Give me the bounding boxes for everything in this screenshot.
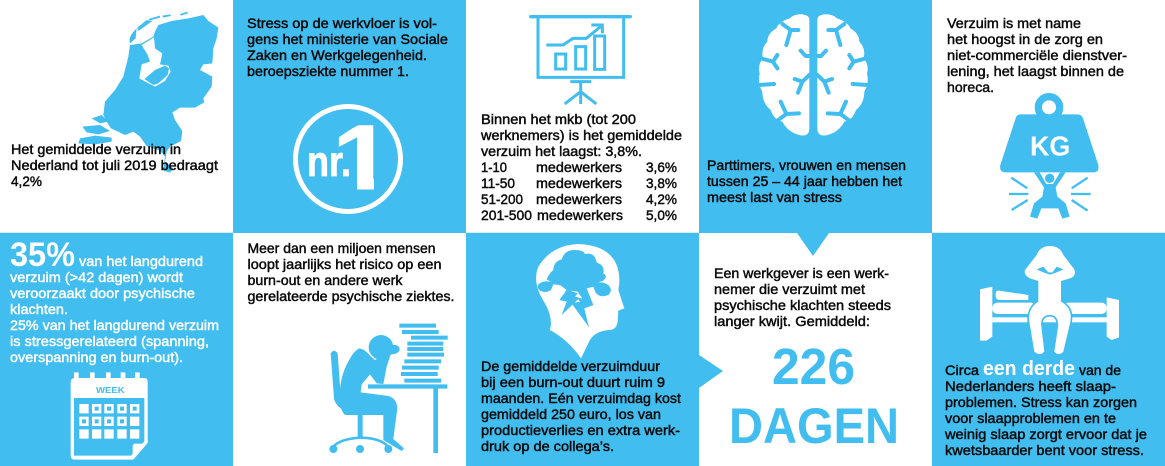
text: sector: niet-commerciële dienstver-	[947, 47, 1127, 63]
text: slaap: Circa	[945, 362, 979, 378]
text: werkgever: Een werkgever is een werk-	[714, 265, 889, 281]
text: beroepsziekte: Stress op de werkvloer is vol-	[247, 15, 437, 31]
icon: person lifting KG weight: KG	[1030, 130, 1070, 161]
icon: person sitting on bed	[980, 246, 1119, 354]
table: verzuim per bedrijfsgrootte: medewerkers	[536, 175, 622, 191]
panel: beroepsziekte nummer 1	[233, 0, 466, 233]
icon: map of the Netherlands	[78, 12, 218, 173]
icon: nr. 1 badge: 1	[332, 107, 393, 209]
table: verzuim per bedrijfsgrootte: 3,8%	[646, 175, 677, 191]
icon: head with storm cloud	[536, 244, 624, 358]
text: verzuimduur: maanden. Eén verzuimdag kost	[481, 390, 681, 406]
table: verzuim per bedrijfsgrootte: 1-10	[481, 159, 507, 175]
text: 35 procent: veroorzaakt door psychische	[10, 285, 195, 301]
text: slaap: van de	[1079, 362, 1121, 378]
text: sector	[947, 15, 1127, 95]
text: parttimers: meest last van stress	[707, 189, 842, 205]
stat: 226 dagen: DAGEN	[729, 398, 899, 454]
text: mkb intro	[480, 111, 682, 159]
table: verzuim per bedrijfsgrootte: 11-50	[481, 175, 515, 191]
panel: slaapproblemen	[932, 233, 1165, 466]
text: slaap: een derde	[983, 358, 1075, 380]
table: verzuim per bedrijfsgrootte: 4,2%	[646, 191, 677, 207]
text: 35 procent: klachten.	[10, 301, 68, 317]
text: 35 procent: van het langdurend	[79, 253, 203, 269]
text: sector: Verzuim is met name	[947, 15, 1081, 31]
stat: 226 dagen: 226	[772, 338, 855, 395]
text: slaap	[944, 358, 1147, 458]
panel: gemiddeld verzuim Nederland	[0, 0, 233, 233]
icon: brain	[759, 14, 868, 135]
text: verzuimduur: druk op de collega’s.	[481, 438, 614, 454]
arrow: down from parttimers panel	[797, 233, 829, 256]
text: burn-out risico: Meer dan een miljoen mensen	[248, 240, 436, 256]
table: verzuim per bedrijfsgrootte: medewerkers	[536, 159, 622, 175]
text: 35 procent: 25% van het langdurend verzuim	[10, 317, 219, 333]
text: mkb intro: werknemers) is het gemiddelde	[480, 127, 682, 143]
table: verzuim per bedrijfsgrootte: 3,6%	[646, 159, 677, 175]
icon: person lifting KG weight	[1000, 97, 1099, 219]
text: sector: horeca.	[947, 79, 994, 95]
text: burn-out risico: burn-out en andere werk	[248, 272, 404, 288]
text: slaap: kwetsbaarder bent voor stress.	[945, 442, 1144, 458]
text: 35 procent	[10, 236, 219, 365]
panel: parttimers brain	[699, 0, 932, 233]
text: 35 procent: verzuim (>42 dagen) wordt	[10, 269, 183, 285]
text: 35 procent: overspanning en burn-out).	[10, 349, 183, 365]
panel: burn-out risico	[233, 233, 466, 466]
text: slaap: voor slaapproblemen en te	[945, 410, 1116, 426]
text: verzuimduur	[481, 358, 681, 454]
text: slaap: Nederlanders heeft slaap-	[945, 378, 1116, 394]
text: werkgever: psychische klachten steeds	[714, 297, 891, 313]
text: werkgever	[714, 265, 891, 329]
text: beroepsziekte: Zaken en Werkgelegenheid.	[247, 47, 427, 63]
text: slaap: weinig slaap zorgt ervoor dat je	[944, 426, 1147, 442]
table: verzuim per bedrijfsgrootte: 5,0%	[646, 207, 677, 223]
icon: week calendar: WEEK	[96, 385, 125, 395]
icon: nr. 1 badge: nr.	[307, 138, 351, 186]
text: werkgever: nemer die verzuimt met	[714, 281, 865, 297]
text: parttimers	[707, 157, 906, 205]
text: burn-out risico: loopt jaarlijks het risico op een	[248, 256, 442, 272]
icon: week calendar	[71, 372, 148, 460]
text: verzuimduur: De gemiddelde verzuimduur	[481, 358, 660, 374]
text: sector: het hoogst in de zorg en	[947, 31, 1103, 47]
text: sector: lening, het laagst binnen de	[947, 63, 1124, 79]
text: mkb intro: Binnen het mkb (tot 200	[481, 111, 636, 127]
text: beroepsziekte: beroepsziekte nummer 1.	[247, 63, 409, 79]
panel: mkb verzuim	[466, 0, 699, 233]
panel: verzuim per sector	[932, 0, 1165, 233]
icon: presentation board with chart	[531, 17, 630, 104]
text: beroepsziekte	[247, 15, 448, 79]
table: verzuim per bedrijfsgrootte: 51-200	[481, 191, 523, 207]
text: mkb intro: verzuim het laagst: 3,8%.	[481, 143, 642, 159]
table: verzuim per bedrijfsgrootte	[481, 159, 677, 223]
text: slaap: problemen. Stress kan zorgen	[945, 394, 1137, 410]
text: burn-out risico: gerelateerde psychische ziektes.	[248, 288, 454, 304]
text: gemiddeld verzuim: Nederland tot juli 2019 bedraagt	[11, 157, 218, 173]
table: verzuim per bedrijfsgrootte: medewerkers	[537, 207, 623, 223]
stat: 226 dagen	[729, 338, 899, 454]
text: 35 procent: 35%	[10, 236, 75, 274]
text: parttimers: Parttimers, vrouwen en mensen	[707, 157, 906, 173]
text: beroepsziekte: gens het ministerie van Sociale	[247, 31, 448, 47]
text: gemiddeld verzuim	[11, 141, 218, 189]
table: verzuim per bedrijfsgrootte: medewerkers	[536, 191, 622, 207]
text: gemiddeld verzuim: 4,2%	[11, 173, 42, 189]
panel: 226 dagen	[699, 233, 932, 466]
panel: verzuimduur burn-out	[466, 233, 699, 466]
text: verzuimduur: productieverlies en extra werk-	[481, 422, 680, 438]
text: 35 procent: is stressgerelateerd (spanning,	[10, 333, 209, 349]
table: verzuim per bedrijfsgrootte: 201-500	[481, 207, 532, 223]
arrow: right from verzuimduur panel	[699, 355, 723, 388]
text: burn-out risico	[248, 240, 454, 304]
text: verzuimduur: bij een burn-out duurt ruim 9	[481, 374, 665, 390]
icon: person at desk with paper stack	[329, 324, 448, 453]
icon: nr. 1 badge	[296, 106, 400, 212]
text: werkgever: langer kwijt. Gemiddeld:	[714, 313, 870, 329]
panel: langdurend verzuim	[0, 233, 233, 466]
text: verzuimduur: gemiddeld 250 euro, los van	[481, 406, 661, 422]
text: gemiddeld verzuim: Het gemiddelde verzuim in	[11, 141, 181, 157]
text: parttimers: tussen 25 – 44 jaar hebben het	[707, 173, 902, 189]
